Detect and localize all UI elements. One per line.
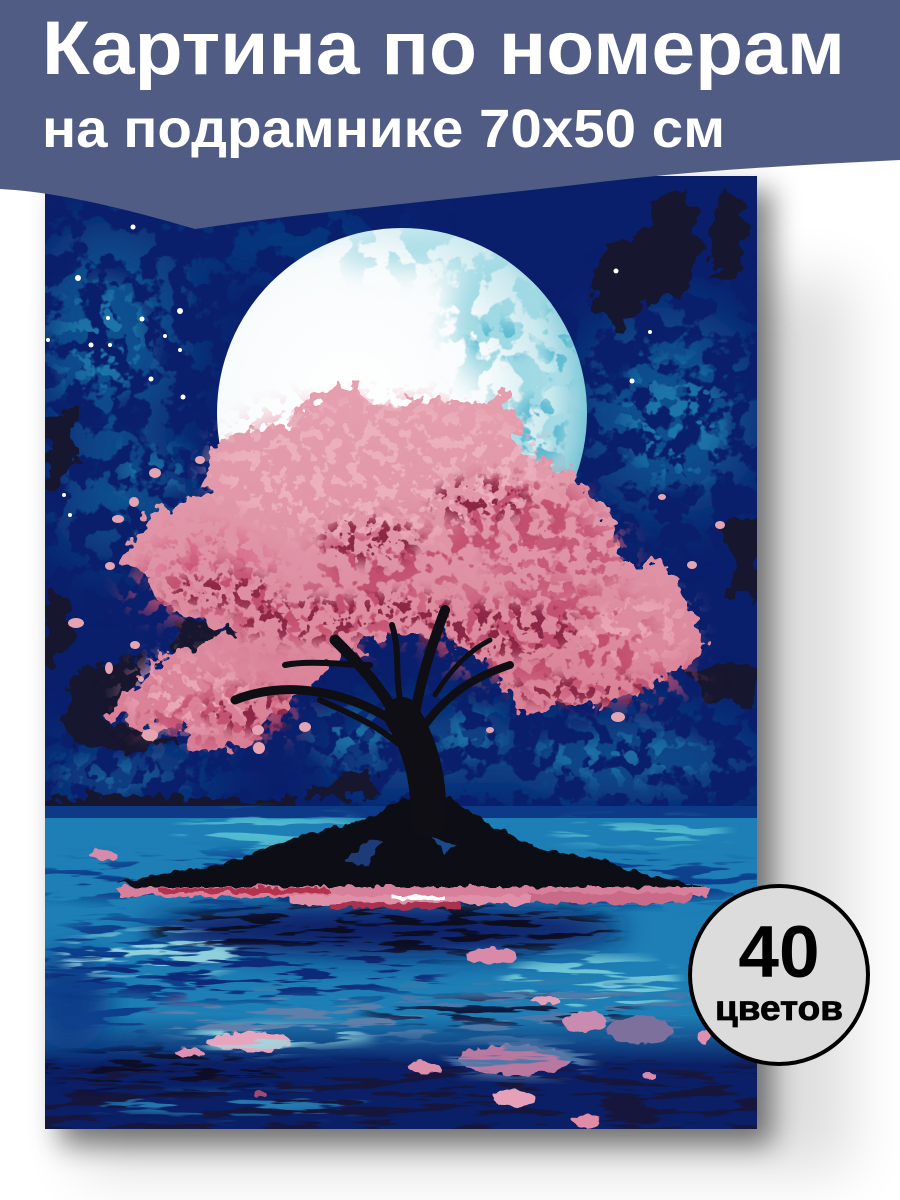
foliage xyxy=(105,385,705,752)
tree trunk and branches xyxy=(235,610,510,820)
badge number: 40 xyxy=(738,912,820,993)
stars xyxy=(46,224,652,517)
night sky xyxy=(45,176,757,806)
falling petals xyxy=(68,456,725,754)
reflection streak overlay xyxy=(202,1031,595,1078)
pink reflections xyxy=(89,850,712,1129)
water streaks xyxy=(60,814,730,1115)
header banner xyxy=(0,0,900,229)
dark sky patches xyxy=(45,190,757,815)
island with pink reflection xyxy=(118,798,710,909)
moon xyxy=(217,228,587,475)
subtitle: на подрамнике 70х50 см xyxy=(42,99,725,159)
foliage speckles xyxy=(125,400,700,741)
canvas drop shadow xyxy=(60,190,850,1170)
water xyxy=(45,804,757,1129)
painting: moon and cherry tree xyxy=(45,176,757,1129)
badge: 40 colours xyxy=(690,886,868,1064)
title: Картина по номерам xyxy=(42,6,845,91)
badge label: цветов xyxy=(715,989,843,1028)
